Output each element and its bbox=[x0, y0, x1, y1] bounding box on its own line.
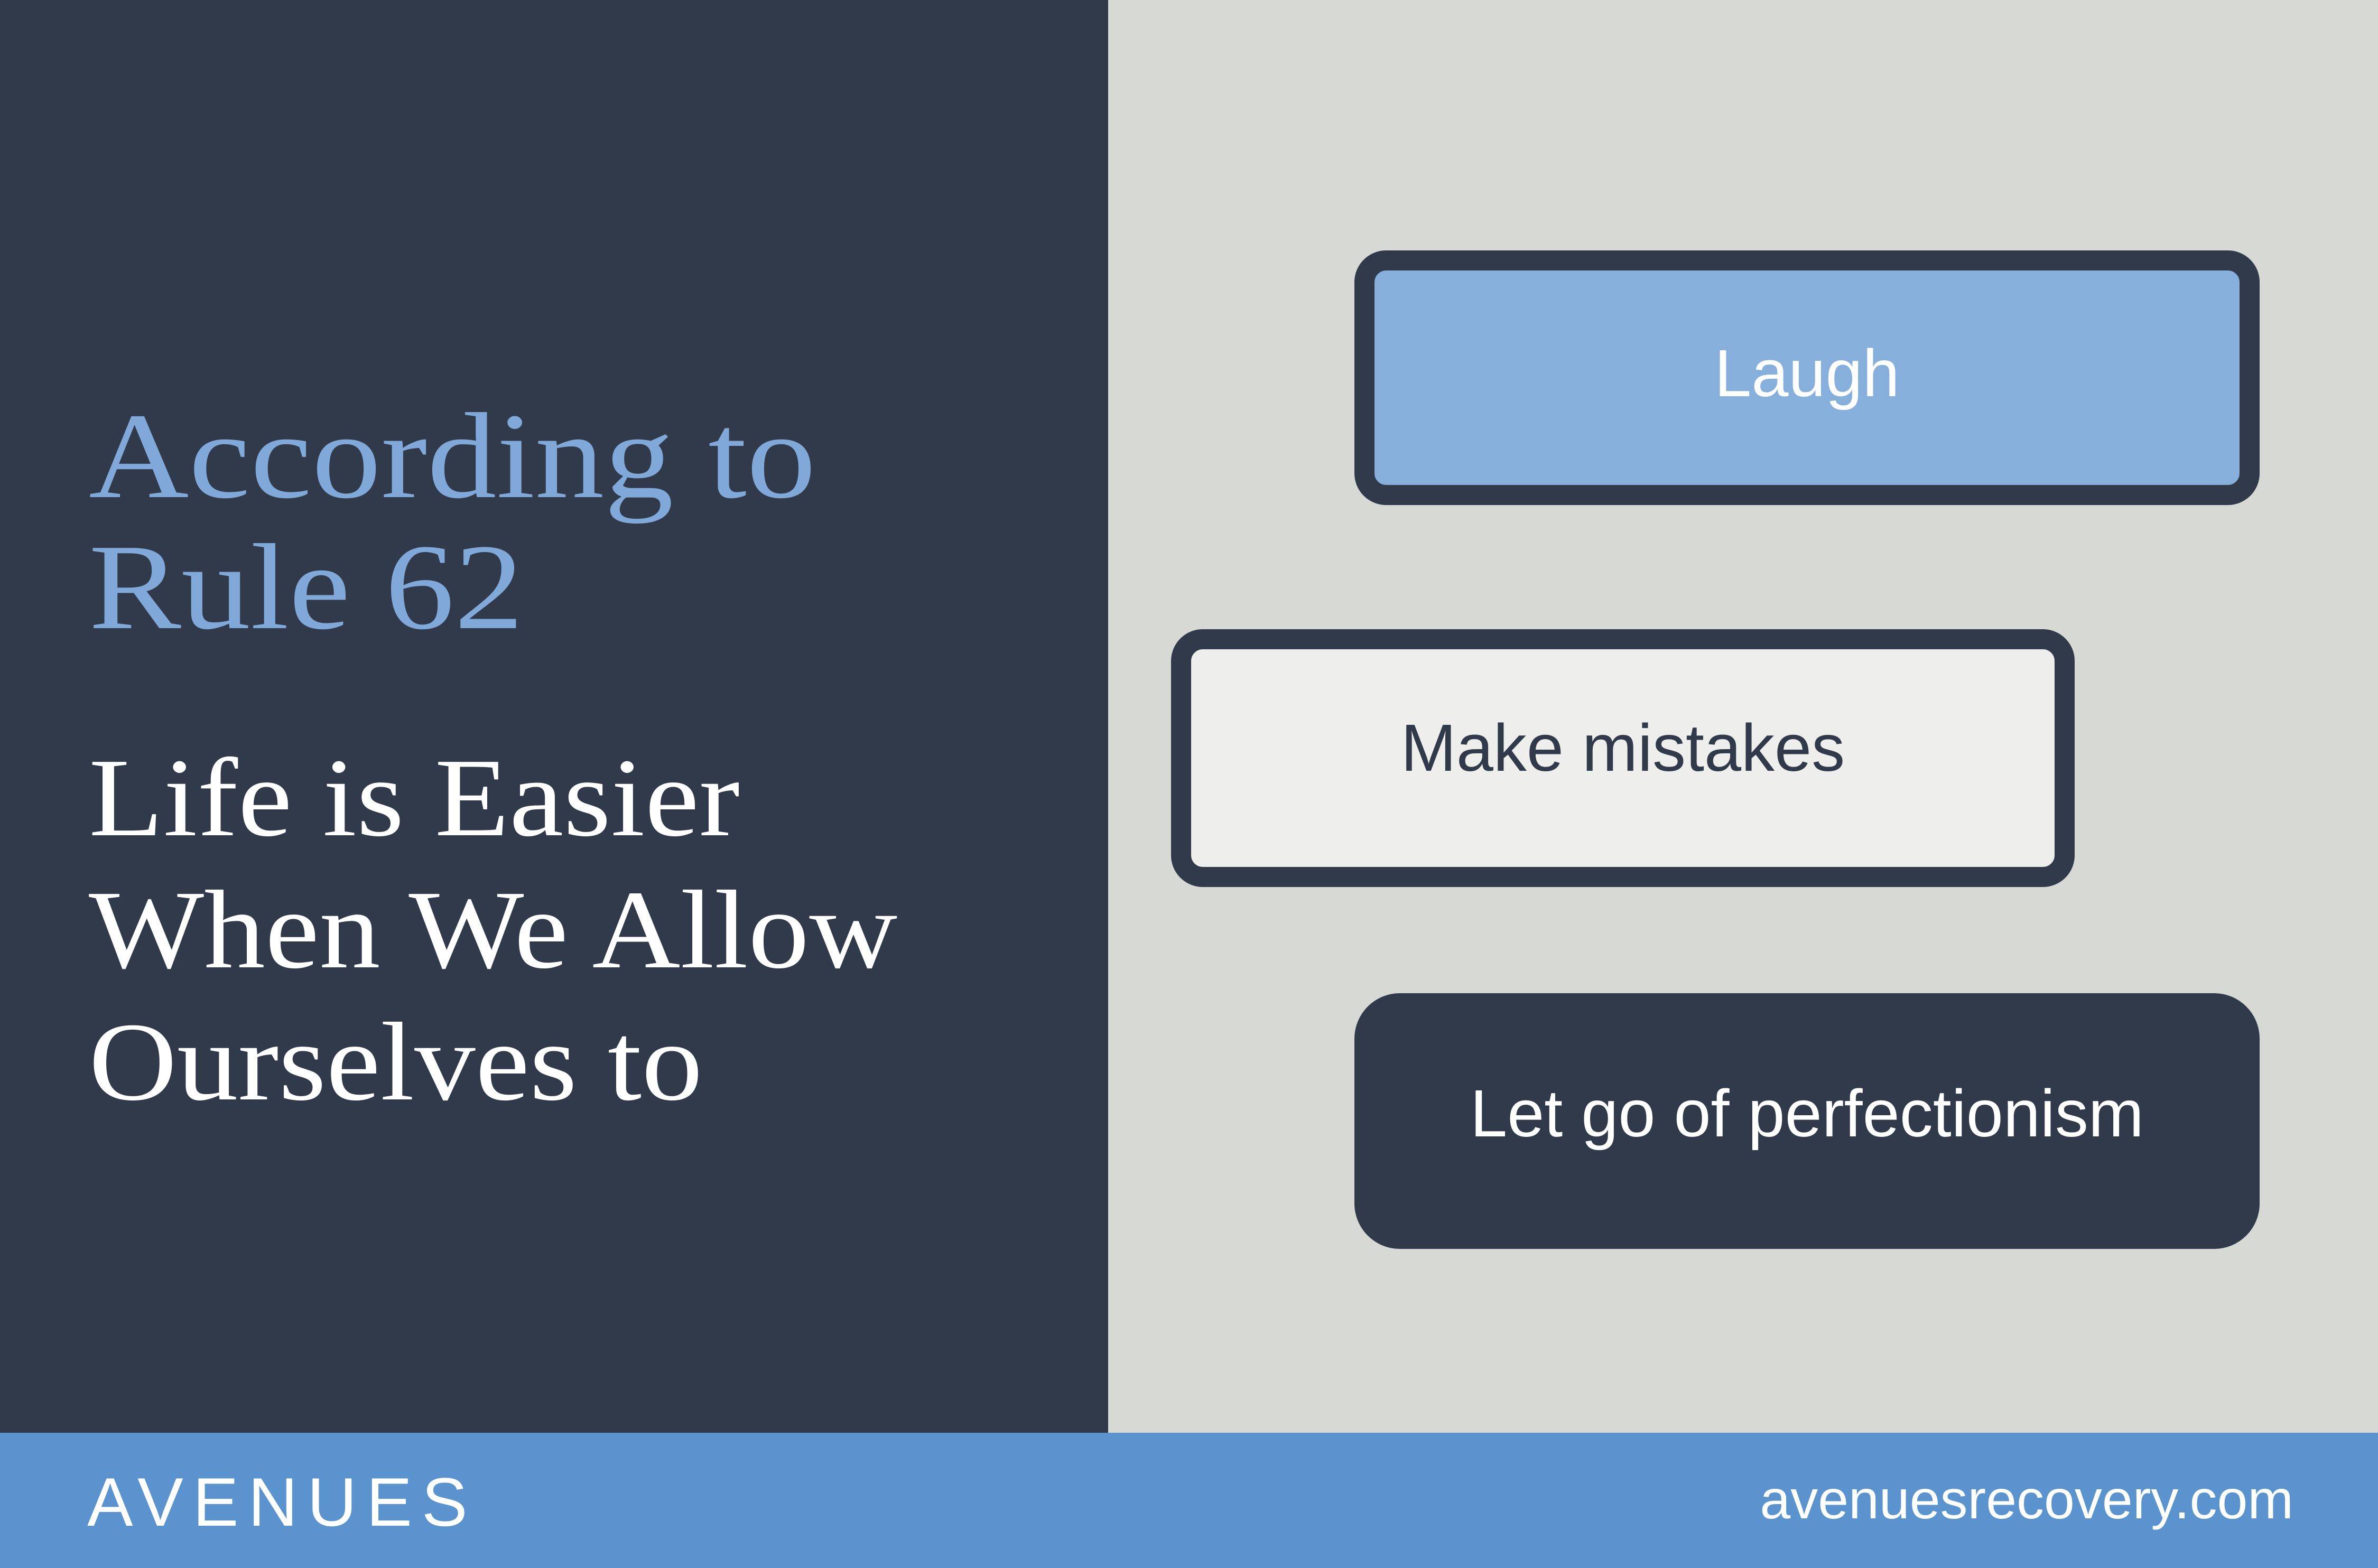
box: Laugh bbox=[1354, 250, 2260, 505]
heading: According to Rule 62 bbox=[89, 388, 816, 655]
box: Let go of perfectionism: Let go of perfectionism bbox=[1470, 1076, 2144, 1151]
box: Make mistakes bbox=[1171, 629, 2075, 887]
footer bbox=[0, 1433, 2378, 1568]
text block: subtitle: When We Allow bbox=[89, 867, 897, 992]
heading: According to Rule 62: Rule 62 bbox=[89, 519, 524, 655]
box: Make mistakes: Make mistakes bbox=[1401, 710, 1845, 785]
box: Laugh: Laugh bbox=[1714, 336, 1900, 410]
text block: subtitle bbox=[89, 735, 897, 1124]
heading: According to Rule 62: According to bbox=[89, 388, 816, 524]
text block: subtitle: Ourselves to bbox=[89, 1000, 703, 1124]
text block: subtitle: Life is Easier bbox=[89, 735, 740, 860]
panel: left dark bbox=[0, 0, 1108, 1433]
text: website: avenuesrecovery.com bbox=[1760, 1469, 2293, 1530]
logo: AVENUES: AVENUES bbox=[87, 1463, 477, 1541]
box: Let go of perfectionism bbox=[1354, 993, 2260, 1249]
